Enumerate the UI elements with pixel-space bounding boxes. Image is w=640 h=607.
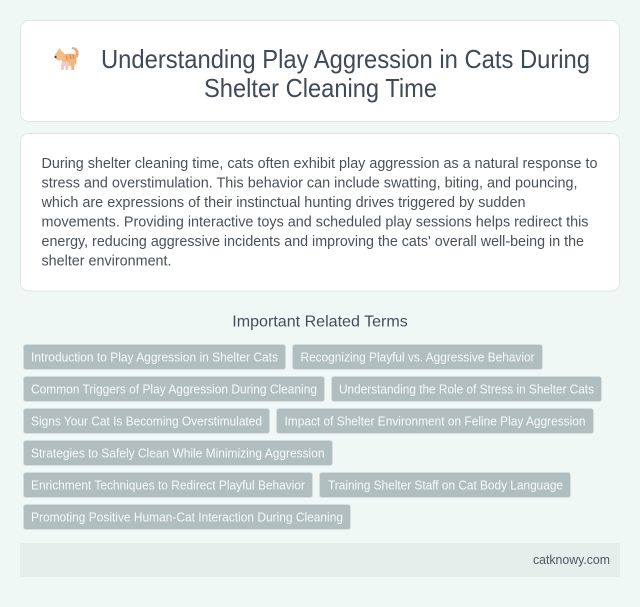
text block: summary paragraph: which are expressions of their instinctual hunting drives triggered by sudden: [41, 194, 525, 211]
chip: [320, 472, 570, 498]
heading: Shelter Cleaning Time: [204, 75, 437, 103]
chip: [276, 408, 594, 434]
chip: Recognizing Playful vs. Aggressive Behavior: [300, 350, 535, 364]
chip: [24, 440, 332, 466]
chip: [24, 408, 270, 434]
footer text: source: catknowy.com: [533, 552, 610, 567]
chip: Understanding the Role of Stress in Shelter Cats: [339, 382, 594, 396]
panel: related term chips: [24, 344, 602, 530]
heading: related terms: Important Related Terms: [232, 314, 408, 331]
chip: Impact of Shelter Environment on Feline Play Aggression: [284, 414, 586, 428]
panel: title card: [20, 20, 620, 122]
text block: summary paragraph: movements. Providing interactive toys and scheduled play sessions helps redirect this: [42, 214, 588, 230]
chip: Training Shelter Staff on Cat Body Language: [328, 478, 563, 492]
footer: [20, 543, 620, 577]
chip: Introduction to Play Aggression in Shelter Cats: [31, 350, 278, 364]
text block: summary paragraph: During shelter cleaning time, cats often exhibit play aggression as a natural response to: [42, 155, 598, 172]
chip: [24, 504, 350, 530]
chip: [24, 344, 286, 370]
chip: Signs Your Cat Is Becoming Overstimulated: [31, 414, 262, 428]
chip: [24, 376, 324, 402]
text block: summary paragraph: shelter environment.: [42, 252, 172, 270]
chip: Promoting Positive Human-Cat Interaction During Cleaning: [31, 510, 343, 524]
chip: [332, 376, 602, 402]
heading: Understanding Play Aggression in Cats During: [101, 46, 590, 74]
text block: summary paragraph: [41, 155, 598, 270]
panel: summary: [20, 134, 620, 291]
chip: Strategies to Safely Clean While Minimizing Aggression: [31, 446, 324, 460]
text block: summary paragraph: energy, reducing aggressive incidents and improving the cats' overall well-being in the: [42, 233, 584, 250]
chip: Common Triggers of Play Aggression During Cleaning: [31, 382, 317, 396]
icon: cat: [54, 47, 79, 70]
chip: Enrichment Techniques to Redirect Playful Behavior: [31, 478, 306, 492]
chip: [292, 344, 542, 370]
text block: summary paragraph: stress and overstimulation. This behavior can include swatting, biting, and pouncing,: [42, 174, 578, 192]
chip: [24, 472, 312, 498]
heading: [101, 46, 590, 103]
